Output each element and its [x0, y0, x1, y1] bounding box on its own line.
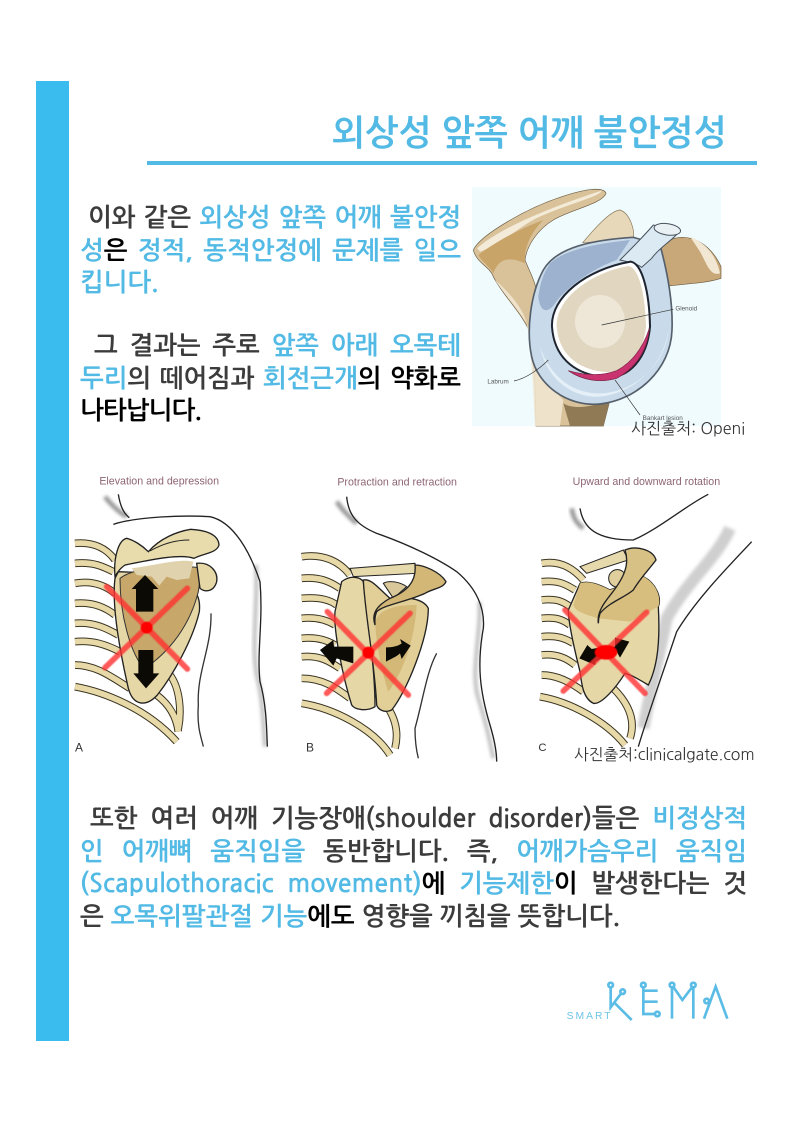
- text block: shoulder disorder: 은 오목위팔관절 기능에도 영향을 끼침을 뜻합니다.: [80, 904, 620, 929]
- logo: Smart KEMA: SMART: [567, 1011, 613, 1022]
- illustration: glenoid and Bankart lesion: Bankart lesion: [643, 415, 683, 422]
- text block: intro: 킵니다.: [80, 270, 159, 295]
- caption: photo source Openi: 사진출처: Openi: [631, 421, 745, 437]
- sidebar: [36, 81, 69, 1041]
- illustration: panel A elevation and depression: Elevation and depression: [99, 475, 219, 487]
- illustration: glenoid and Bankart lesion: Labrum: [487, 379, 509, 386]
- text block: intro: 성은 정적, 동적안정에 문제를 일으: [80, 238, 461, 263]
- text block: result: 나타납니다.: [80, 398, 201, 423]
- text block: intro: 이와 같은 외상성 앞쪽 어깨 불안정: [88, 205, 461, 230]
- illustration: panel B protraction and retraction: B: [306, 741, 314, 755]
- title: 외상성 앞쪽 어깨 불안정성: [332, 116, 727, 151]
- text block: shoulder disorder: 인 어깨뼈 움직임을 동반합니다. 즉, 어깨가슴우리 움직임: [80, 839, 747, 864]
- illustration: glenoid and Bankart lesion: Glenoid: [675, 306, 698, 313]
- illustration: panel A elevation and depression: A: [75, 741, 83, 755]
- text block: result: [80, 332, 461, 423]
- text block: shoulder disorder: (Scapulothoracic movement)에 기능제한이 발생한다는 것: [80, 871, 747, 896]
- caption: photo source clinicalgate: 사진출처:clinicalgate.com: [574, 748, 755, 763]
- illustration: panel C upward and downward rotation: C: [538, 742, 547, 754]
- text block: result: 그 결과는 주로 앞쪽 아래 오목테: [94, 333, 461, 358]
- title underline: [147, 161, 757, 165]
- text block: shoulder disorder: 또한 여러 어깨 기능장애(shoulder disorder)들은 비정상적: [90, 806, 747, 831]
- illustration: panel C upward and downward rotation: Upward and downward rotation: [573, 476, 720, 488]
- text block: intro: [80, 204, 461, 295]
- text block: result: 두리의 떼어짐과 회전근개의 약화로: [80, 366, 461, 391]
- text block: shoulder disorder: [80, 806, 747, 929]
- illustration: panel B protraction and retraction: Protraction and retraction: [337, 477, 457, 489]
